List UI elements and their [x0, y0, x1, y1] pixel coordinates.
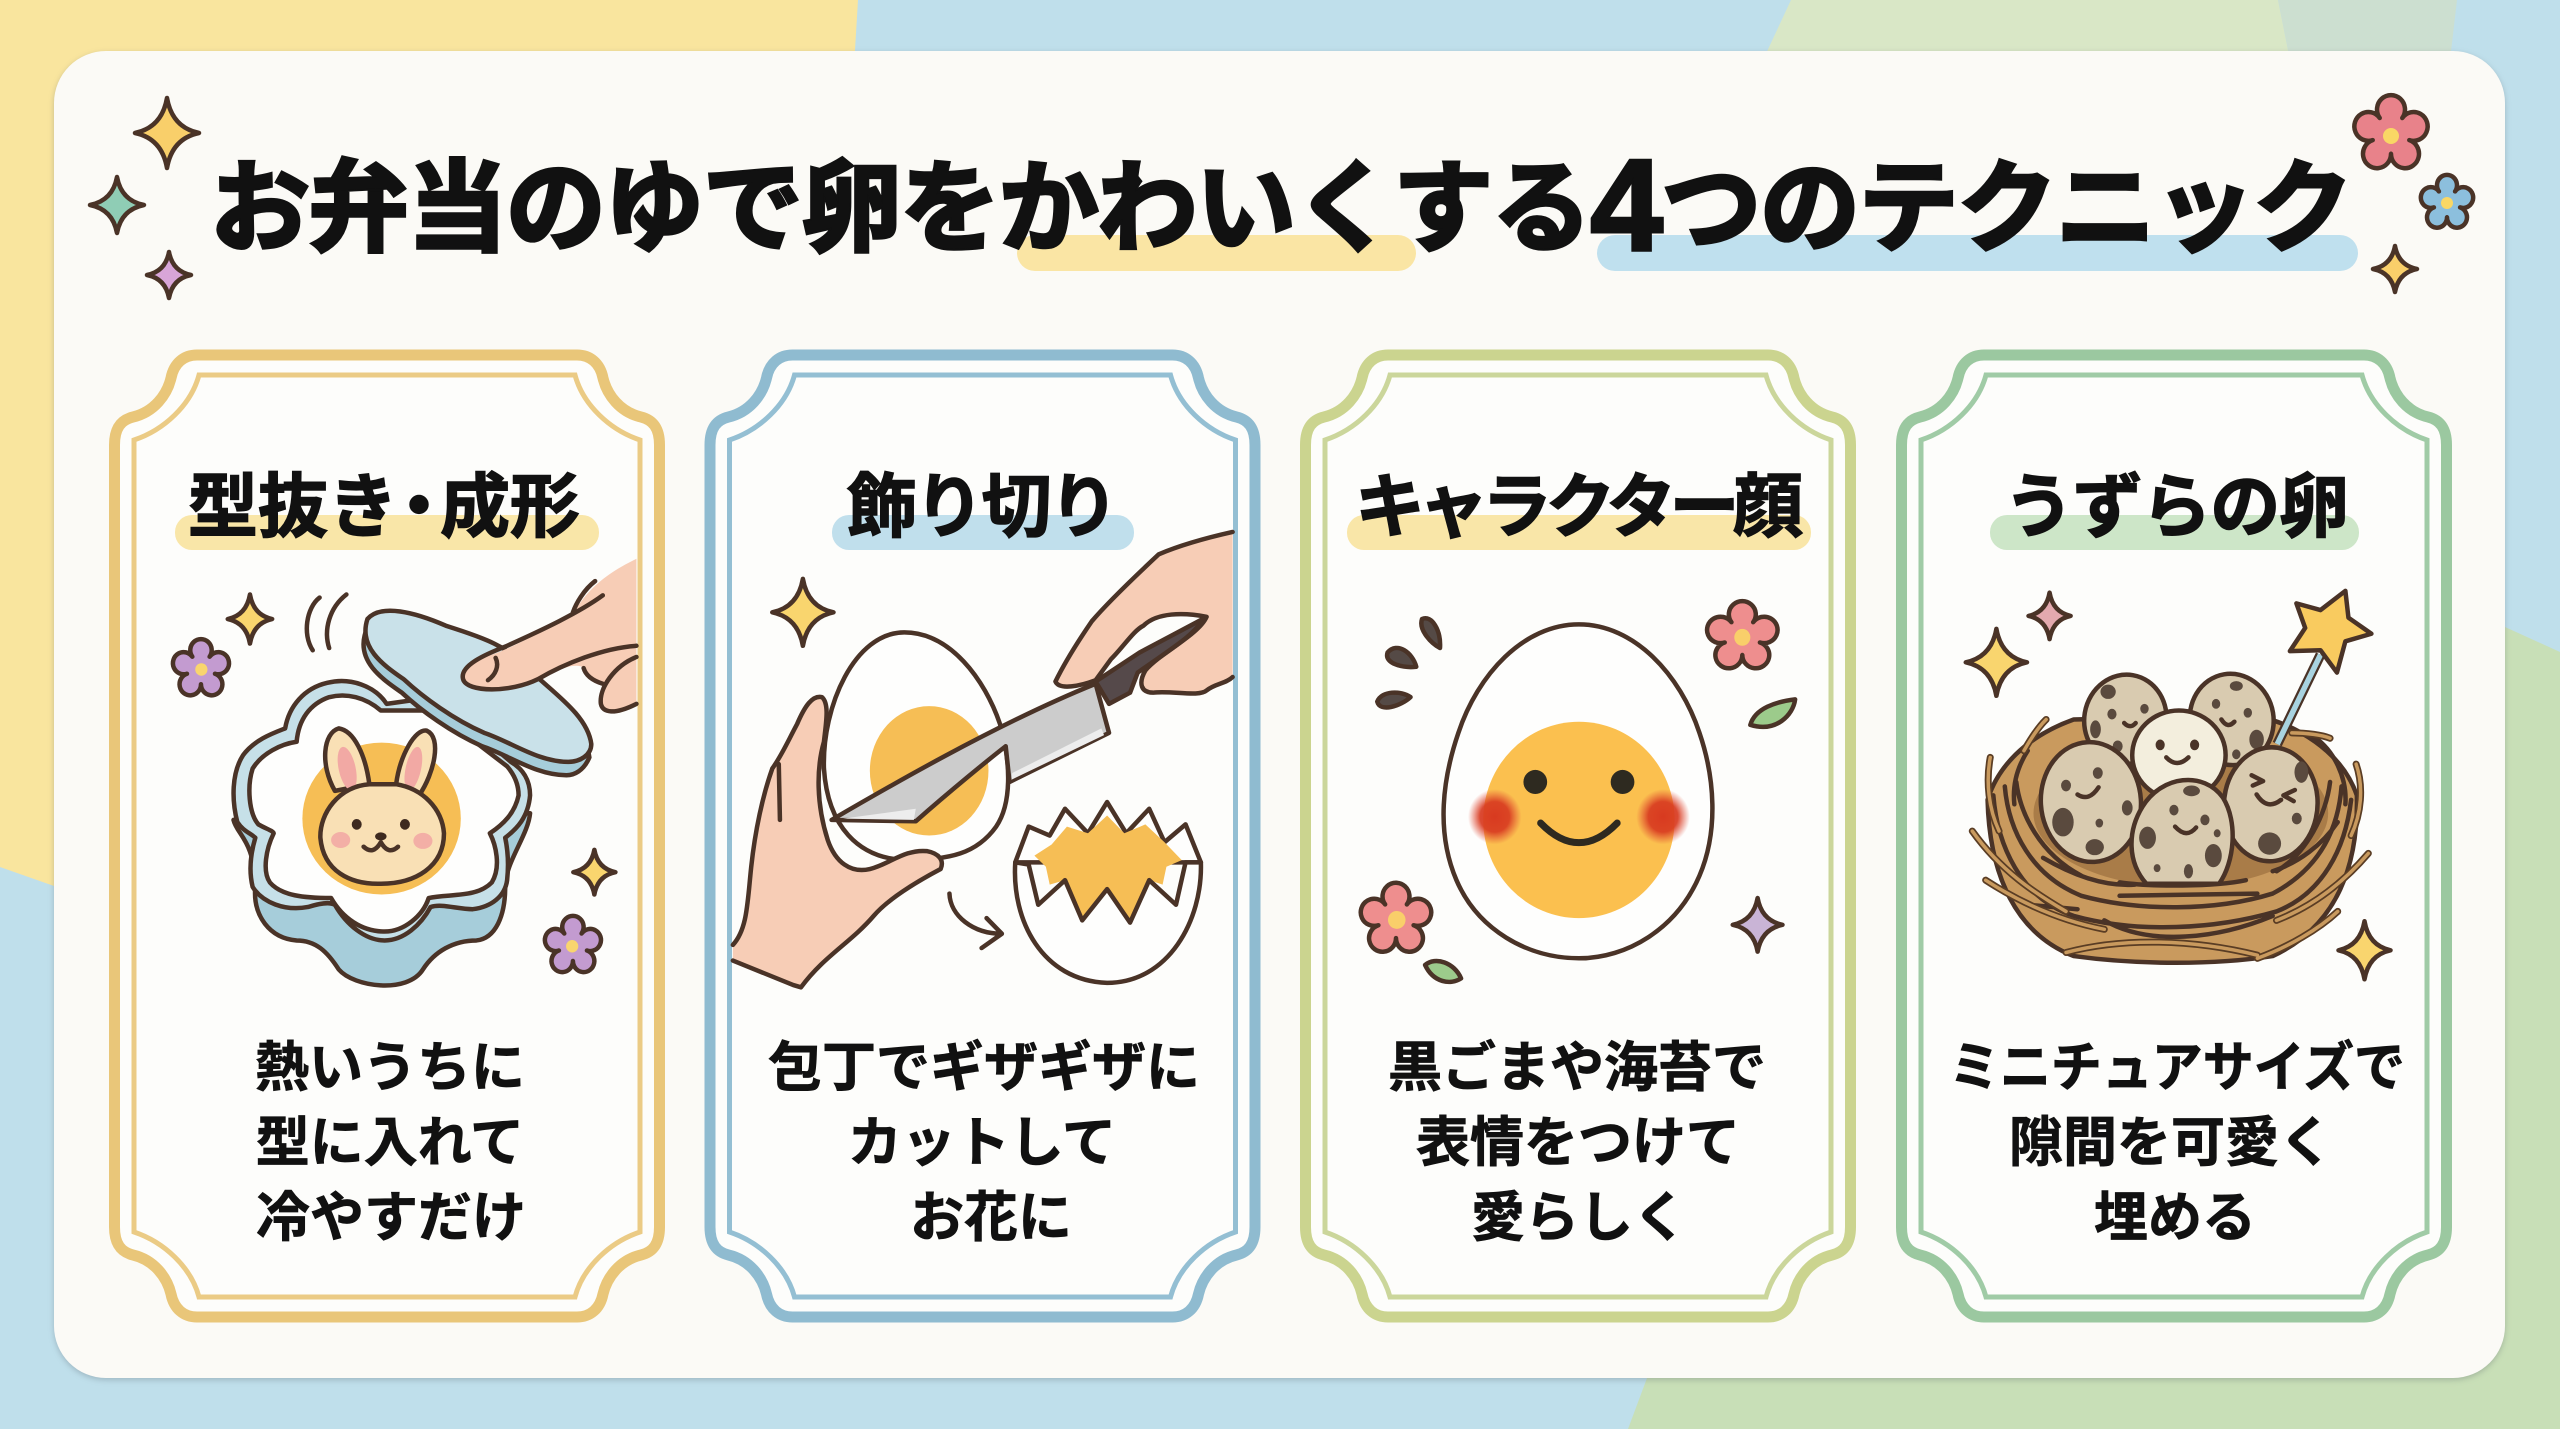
mold lid [364, 611, 591, 775]
back eggs [2077, 665, 2281, 774]
card 4 heading highlight [1990, 515, 2359, 550]
illustration: quail eggs in nest [1966, 591, 2391, 979]
card 1 heading: 型抜き・成形 [188, 468, 580, 546]
bunny face [320, 728, 444, 884]
card 2 description: 包丁でギザギザに [768, 1038, 1200, 1098]
card 3 frame [1306, 355, 1850, 1317]
card 3 description [1388, 1038, 1766, 1248]
boiled egg [824, 632, 1008, 860]
right hand [1055, 532, 1233, 694]
white egg [2132, 711, 2226, 800]
panel: card 3 キャラクター顔 [1306, 355, 1850, 1317]
card 4 frame [1902, 355, 2446, 1317]
card 4 heading: うずらの卵 [2004, 468, 2349, 546]
sesame seeds [1377, 618, 1440, 707]
panel: card 1 型抜き・成形 [114, 355, 660, 1317]
card 3 description: 黒ごまや海苔で [1388, 1038, 1766, 1098]
pressing finger [462, 559, 636, 713]
title text: つのテクニック [1661, 153, 2353, 265]
yolk face [1468, 722, 1690, 918]
flower mold [234, 681, 530, 985]
egg [1444, 624, 1712, 958]
card 4 description: ミニチュアサイズで [1949, 1038, 2405, 1098]
panel: card 2 飾り切り [710, 355, 1255, 1317]
illustration: egg mold with bunny [173, 559, 636, 985]
title text: 4 [1590, 132, 1663, 278]
card 2 description: カットして [848, 1113, 1116, 1173]
sparkles and flowers [173, 594, 615, 972]
card 2 frame [710, 355, 1255, 1317]
card 2 description: お花に [910, 1188, 1072, 1248]
title highlight: yellow [1017, 235, 1416, 271]
title block [210, 132, 2358, 278]
zigzag cut egg [1015, 802, 1201, 983]
card 2 description [768, 1038, 1200, 1248]
card 1 description: 型に入れて [256, 1113, 524, 1173]
title decorations right: flowers and sparkle [2354, 95, 2473, 292]
right egg [2213, 735, 2329, 874]
card 3 description: 表情をつけて [1416, 1113, 1740, 1173]
card 2 heading: 飾り切り [847, 468, 1119, 546]
title highlight: blue [1597, 235, 2358, 271]
card 3 heading highlight [1347, 515, 1811, 550]
left egg [2024, 723, 2158, 881]
panel: card 4 うずらの卵 [1902, 355, 2446, 1317]
card 4 description: 埋める [2094, 1188, 2256, 1248]
flowers and leaves [1361, 601, 1795, 982]
card 1 description: 冷やすだけ [256, 1188, 526, 1248]
illustration: cutting egg with knife [733, 532, 1233, 987]
card 3 description: 愛らしく [1471, 1188, 1687, 1248]
card 3 heading: キャラクター顔 [1355, 468, 1803, 546]
card 1 description: 熱いうちに [255, 1038, 525, 1098]
left hand [733, 697, 942, 987]
sparkle [772, 579, 834, 646]
card 1 frame [114, 355, 660, 1317]
card 1 heading highlight [175, 515, 599, 550]
nest front rim [2043, 822, 2338, 886]
illustration: smiling egg [1361, 601, 1795, 982]
arrow [949, 894, 1002, 948]
card 4 description: 隙間を可愛く [2009, 1113, 2333, 1173]
nest [1972, 715, 2368, 963]
egg yolk [302, 743, 461, 894]
title text: お弁当のゆで卵をかわいくする [210, 153, 1592, 265]
front egg [2132, 780, 2233, 884]
title decorations left: sparkles [90, 98, 199, 298]
sparkles [1966, 593, 2391, 979]
card 1 description [255, 1038, 526, 1248]
star wand [2277, 591, 2371, 744]
kitchen knife [832, 619, 1203, 821]
card 4 description [1949, 1038, 2405, 1248]
card 2 heading highlight [832, 515, 1134, 550]
